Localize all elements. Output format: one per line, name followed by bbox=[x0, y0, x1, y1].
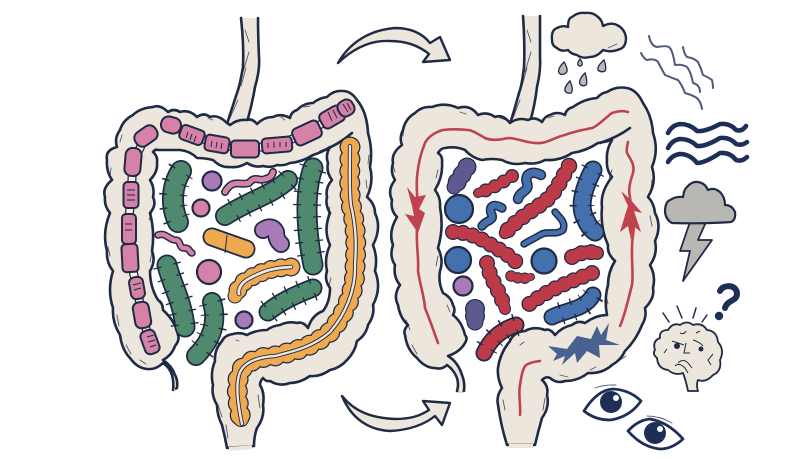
bacterium: red short 1 bbox=[478, 176, 512, 193]
icon: wind lines bbox=[641, 36, 713, 109]
bacterium: orange capsule bbox=[212, 235, 246, 253]
arrow: top curved bbox=[338, 28, 450, 63]
arrow: bottom curved bbox=[342, 396, 450, 431]
panel: healthy gut bbox=[104, 18, 378, 449]
icon: right eye bbox=[628, 416, 683, 449]
bacterium: green rod 6 bbox=[268, 288, 313, 312]
bacterium: red long horizontal bbox=[453, 232, 516, 262]
bacterium: green rod 4 bbox=[167, 265, 185, 327]
bacterium: dark purple lump 1 bbox=[454, 167, 467, 187]
esophagus: healthy bbox=[227, 18, 259, 124]
esophagus: unhealthy bbox=[510, 16, 540, 124]
icon: navy waves bbox=[668, 124, 747, 163]
icon: question mark bbox=[715, 286, 737, 320]
bacterium: blue rod lower bbox=[552, 295, 593, 317]
bacterium: purple blob bbox=[263, 227, 281, 244]
icon: left eye bbox=[584, 385, 641, 420]
icon: worried brain bbox=[654, 306, 722, 391]
icon: storm cloud with lightning bbox=[665, 182, 735, 281]
inflamed red line: lower bbox=[519, 361, 540, 415]
icon: rain cloud bbox=[552, 13, 626, 93]
bacterium: green rod 2 bbox=[225, 180, 288, 216]
panel: unhealthy gut bbox=[390, 16, 658, 446]
bacterium: red long rising bbox=[528, 273, 592, 305]
bacterium: red rod with spikes bbox=[484, 325, 516, 353]
bacterium: blue worm long bbox=[524, 212, 564, 244]
bacterium: red diagonal down bbox=[487, 263, 505, 309]
pain spark: blue jagged bbox=[548, 323, 620, 365]
large intestine: unhealthy bbox=[390, 88, 658, 446]
bacterium: dark purple lump 2 bbox=[466, 309, 484, 322]
bacterium: red small centre bbox=[511, 276, 531, 278]
bacterium: blue worm 1 bbox=[518, 173, 541, 199]
large intestine: healthy bbox=[104, 91, 378, 449]
bacterium: red short right bbox=[572, 252, 597, 257]
inflamed red line: transverse and ascending with arrows bbox=[405, 111, 628, 343]
bacterium: orange tube bbox=[235, 267, 291, 296]
bacterium: blue worm 2 bbox=[482, 206, 502, 226]
inflamed red line: descending with arrows bbox=[620, 142, 642, 326]
bacterium: pink worm 2 bbox=[158, 234, 192, 253]
bacteria: round cocci unhealthy bbox=[445, 195, 556, 296]
bacterium: green rod 5 bbox=[196, 302, 214, 356]
bacteria: round cocci healthy bbox=[192, 172, 252, 328]
bacterium: green rod 1 bbox=[173, 171, 181, 222]
bacterium: green rod 3 bbox=[307, 168, 313, 265]
descending colon orange bacteria strand bbox=[237, 146, 356, 424]
small intestine pink chain: healthy bbox=[121, 97, 357, 356]
bacterium: pink worm 1 bbox=[225, 172, 273, 192]
bacterium: blue rod long bbox=[582, 170, 595, 232]
bacterium: red long diagonal bbox=[505, 166, 569, 233]
